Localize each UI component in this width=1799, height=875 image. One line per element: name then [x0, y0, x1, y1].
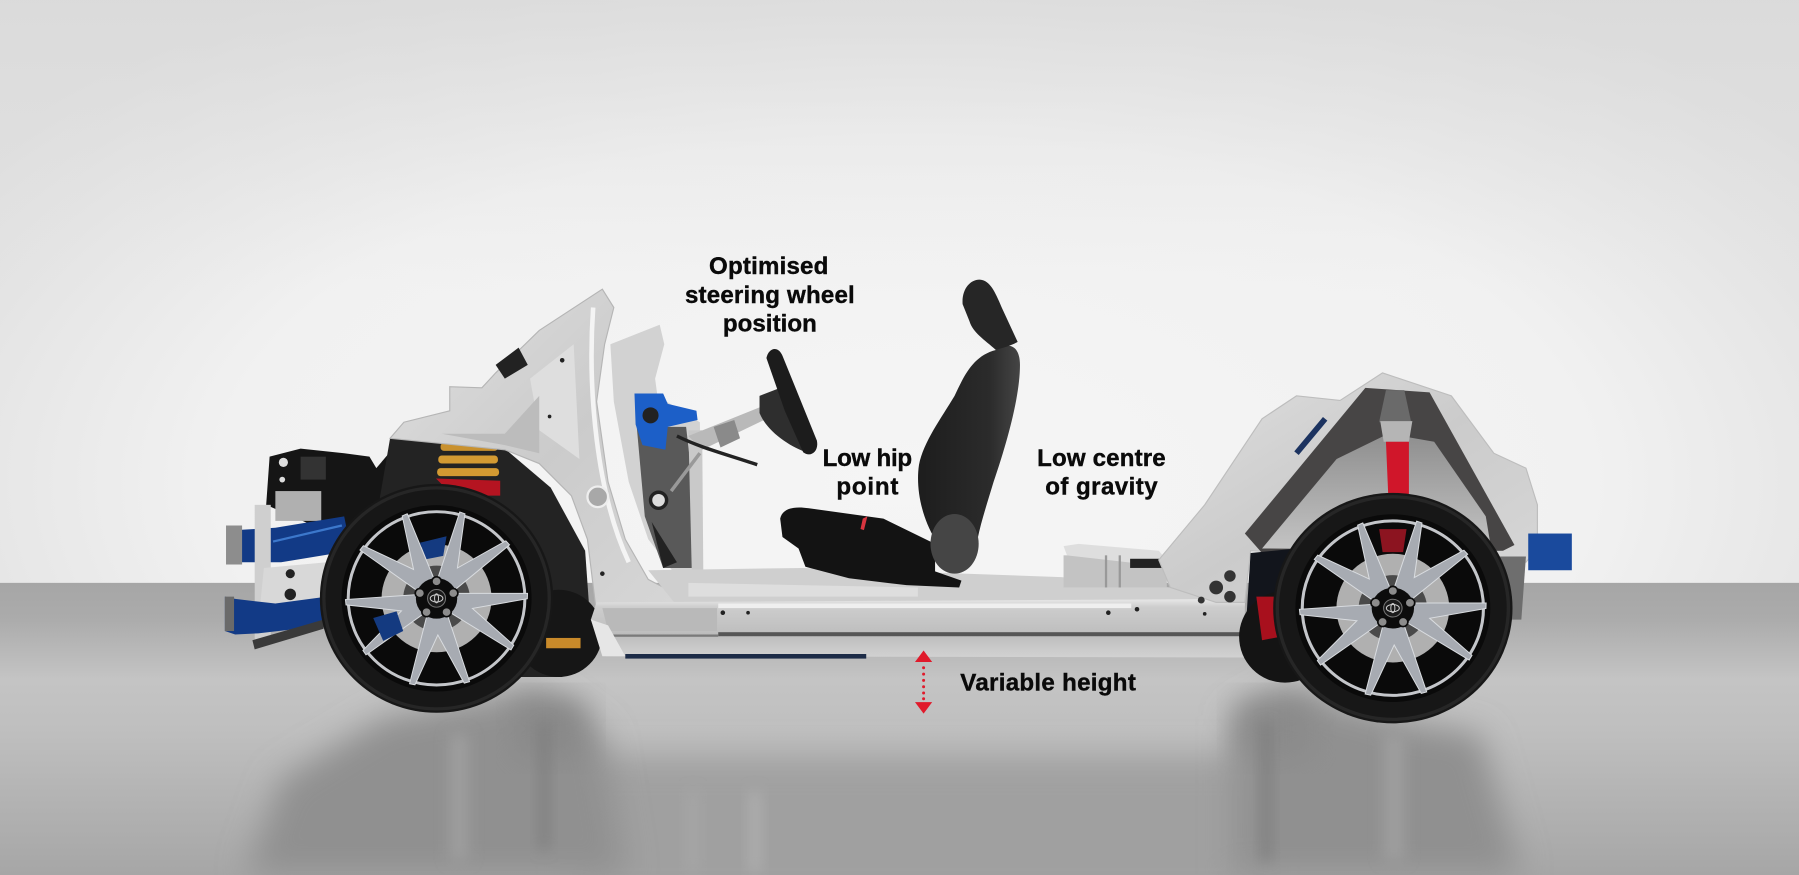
floor pan and side sill	[591, 551, 1245, 659]
label: optimised steering wheel position: steering wheel	[685, 282, 855, 309]
seat base cushion	[780, 507, 961, 587]
label: low hip point	[823, 445, 912, 501]
headrest	[963, 280, 1018, 350]
label: optimised steering wheel position: position	[723, 311, 817, 338]
label: low hip point: point	[836, 474, 898, 501]
seat backrest	[918, 346, 1020, 539]
steering column and wheel	[634, 349, 817, 491]
front wheel arch with spring	[379, 438, 602, 677]
label: low centre of gravity	[1037, 445, 1166, 501]
arrow: variable height indicator	[915, 651, 932, 714]
front wheel	[320, 484, 553, 713]
driver seat	[780, 280, 1020, 587]
floor with reflections	[0, 583, 1799, 875]
label: low centre of gravity: of gravity	[1045, 474, 1158, 501]
background wall	[0, 0, 1799, 585]
seat tag	[860, 516, 867, 530]
label: optimised steering wheel position	[685, 253, 855, 338]
label: low hip point: Low hip	[823, 445, 912, 472]
rear structure and wheel arch	[1159, 373, 1572, 683]
front crash structure and engine bay parts	[225, 442, 436, 649]
rear wheel	[1273, 493, 1513, 723]
label: variable height: Variable height	[960, 670, 1136, 697]
front body structure and A pillar	[390, 289, 717, 614]
battery pack	[1064, 544, 1170, 587]
seat recliner pivot	[930, 514, 979, 574]
label: low centre of gravity: Low centre	[1037, 445, 1166, 472]
label: optimised steering wheel position: Optimised	[709, 253, 828, 280]
